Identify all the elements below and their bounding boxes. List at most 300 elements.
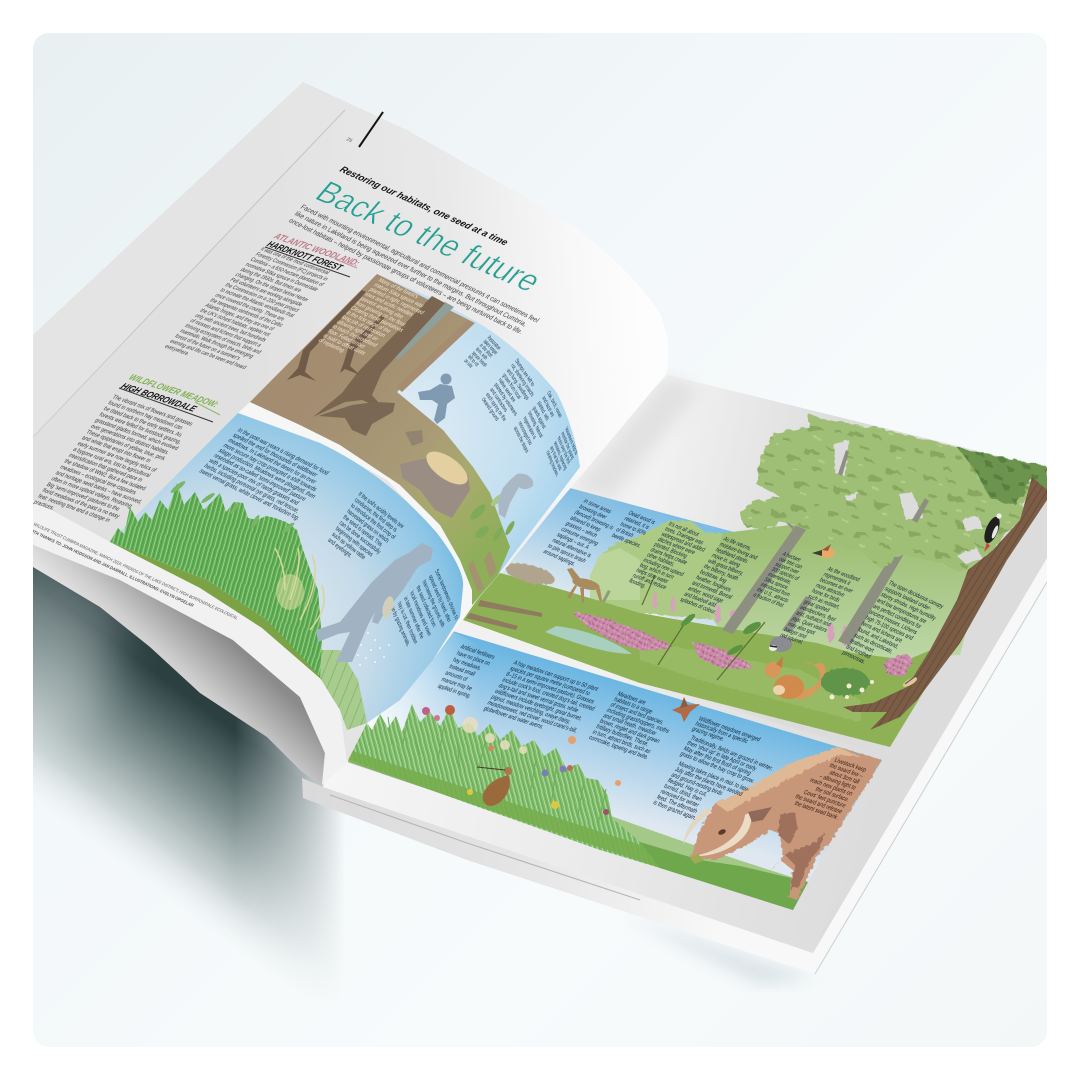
caption: mowing: removed for winter bbox=[659, 789, 700, 809]
body text: High Borrowdale: and heritage seed banks – have survived, bbox=[54, 470, 143, 506]
caption: as life returns: move in, along bbox=[710, 553, 741, 569]
body text: High Borrowdale: feat: needing time and a change in bbox=[36, 494, 111, 524]
wildflowers bbox=[422, 705, 621, 815]
body text: High Borrowdale: early summer are now largely relics of bbox=[76, 441, 158, 474]
caption: post-war: silage production. Meadows were ploughed, then bbox=[216, 448, 317, 500]
body text: Hardknott Forest: of mosses and lichens that support a bbox=[188, 318, 263, 349]
brown ground bbox=[250, 274, 510, 605]
caption: a hectare: support over bbox=[773, 561, 800, 576]
caption: not all about trees: bog, which in turn bbox=[638, 563, 675, 581]
caption: meadows are habitats: and small heath, meadow bbox=[601, 713, 658, 737]
silhouette: forester with chainsaw bbox=[418, 374, 455, 424]
body text: Hardknott Forest: It was one of the most controversial bbox=[258, 247, 331, 276]
intro paragraph: Faced with mounting environmental, agricultural and commercial pressures it can sometimes feel bbox=[299, 203, 542, 324]
caption: soil acidity: such as yellow rattle bbox=[330, 531, 366, 562]
caption: livestock keep: the sward and release bbox=[794, 794, 843, 815]
caption: some areas: (fenced) browsing is bbox=[573, 510, 615, 531]
icon: flying orange bird bbox=[812, 544, 835, 558]
caption: not all about trees: ditches where were bbox=[656, 537, 696, 556]
caption: as the woodland: becomes an ever bbox=[818, 577, 854, 595]
body text: High Borrowdale: be dated back to the early settlers. As bbox=[102, 406, 183, 439]
caption: post-war: reseeded as so-called 'semi-improved' pasture bbox=[212, 453, 307, 503]
caption: sowing: harrowing the ground, with bbox=[421, 579, 445, 630]
body text: High Borrowdale: found in northern hay meadows can bbox=[106, 400, 184, 431]
pale third trunk bbox=[396, 320, 475, 392]
caption: not all about trees: widespread and added bbox=[659, 531, 706, 554]
caption: meadows are habitats: brown, ringlet and dark green bbox=[598, 718, 661, 745]
sky bbox=[502, 488, 734, 626]
heading: Atlantic woodland: HARDKNOTT FOREST bbox=[264, 240, 345, 273]
caption: some areas: In some areas bbox=[582, 498, 613, 515]
body text: Hardknott Forest: changing. On the slopes below Harter bbox=[233, 272, 310, 303]
caption on brown panel: Clearing these plantations bbox=[349, 306, 405, 334]
caption: traditionally: grass to allow the hay crop to grow. bbox=[678, 751, 756, 785]
caption: as life returns: As life returns, bbox=[722, 536, 753, 552]
caption: some areas: grasses – which bbox=[564, 521, 598, 539]
table shadow under the book bbox=[33, 545, 340, 968]
caption: open deciduous canopy: ferns and lichens are bbox=[860, 621, 903, 645]
body text: Hardknott Forest: nonnative Sitka spruce in Dunnerdale bbox=[243, 262, 319, 293]
cow mane highlight bbox=[715, 747, 862, 812]
lighter left side of table shadow bbox=[33, 567, 137, 736]
caption: post-war: In the post-war years a rising demand for food bbox=[235, 428, 330, 477]
caption: not all about trees: including new upland bbox=[642, 557, 685, 578]
caption: as life returns: with grass bilberry, bbox=[705, 558, 745, 577]
title: Back to the future bbox=[308, 175, 549, 298]
caption: open deciduous canopy: and knothed bbox=[844, 644, 872, 661]
caption 3 on sky: guards against bbox=[531, 405, 547, 431]
caption: livestock keep: the soil surface. bbox=[814, 787, 850, 804]
caption: a hectare: oak tree can bbox=[777, 556, 804, 571]
caption 2 on sky: cleared ground bbox=[480, 396, 500, 423]
caption 2 on sky: grown from local bbox=[501, 372, 522, 401]
caption: mowing: and ground-nesting birds bbox=[669, 772, 724, 797]
caption: livestock keep: Cows' feet puncture bbox=[802, 790, 847, 810]
caption: post-war: sweet vernal grass, white clover and Yorkshire fog. bbox=[197, 468, 301, 522]
caption: post-war: with a species-poor mix of hardy grasses and bbox=[206, 458, 300, 507]
caption: mowing: is then grazed again. bbox=[651, 800, 698, 822]
caption: post-war: spelled the end for thousands of wildflower bbox=[231, 433, 318, 479]
caption: a hay meadow: meadowsweet, red clover, wood crane's-bill, bbox=[486, 700, 578, 735]
caption 4 on sky: clearing bracken. bbox=[545, 449, 559, 479]
caption: mowing: July after the plants have seeded bbox=[673, 767, 744, 798]
caption: open deciduous canopy: supports lowland under- bbox=[883, 586, 933, 613]
caption: dead wood: beetle species. bbox=[610, 533, 642, 550]
cow body bbox=[690, 747, 882, 900]
caption: post-war: more secure hay crop prompted a shift towards bbox=[221, 443, 318, 493]
caption: as the woodland: regenerates it bbox=[822, 572, 852, 587]
heather clumps bbox=[572, 611, 911, 676]
caption: a hay meadow: species per square metre (compared to bbox=[508, 666, 591, 697]
small stump bbox=[405, 430, 423, 446]
dead wood logs bbox=[468, 550, 497, 592]
caption: open deciduous canopy: feather-wort bbox=[848, 638, 875, 655]
body text: Hardknott Forest: Forestry Commission (FC) projects in bbox=[253, 252, 329, 283]
caption on brown panel: floor. Felled timber bbox=[326, 329, 367, 350]
caption: as the woodland: may also spot bbox=[786, 621, 817, 637]
caption: soil acidity: conducive, the first step is bbox=[353, 497, 398, 534]
caption: open deciduous canopy: The open deciduous canopy bbox=[887, 580, 945, 610]
caption: a hectare: 300 species of bbox=[770, 567, 800, 582]
caption: open deciduous canopy: ancient mosses. Lichens bbox=[867, 609, 918, 636]
body text: Hardknott Forest: only with ancient trees, but hundreds bbox=[193, 313, 268, 344]
body text: Hardknott Forest: evening and life can be seen and heard bbox=[168, 339, 248, 371]
caption: mowing: feed. The aftermath bbox=[655, 794, 698, 815]
body text: High Borrowdale: a bygone rural era, lost to agricultural bbox=[71, 447, 151, 479]
caption 1 on sky: spruce brash bbox=[470, 350, 488, 369]
caption: dead wood: Dead wood is bbox=[627, 510, 657, 526]
right foreground grass bbox=[640, 842, 808, 910]
caption 1 on sky: Restoration bbox=[485, 335, 502, 352]
caption: a hay meadow: A hay meadow can support up to 50 plant bbox=[512, 660, 600, 693]
body text: Hardknott Forest: Fell volunteers are working alongside bbox=[228, 277, 304, 308]
caption: sowing: the seed collected from bbox=[415, 584, 437, 630]
caption: livestock keep: Livestock keep bbox=[833, 757, 868, 774]
right page surface bbox=[323, 375, 1047, 953]
caption 4 on sky: seasons, replacing bbox=[552, 439, 568, 473]
caption: artificial fertilisers: Artificial fertilisers bbox=[459, 644, 496, 661]
caption: a hay meadow: dog's-tail and sweet vernal grass, while bbox=[497, 683, 580, 714]
caption 2 on sky: planted by volunteers bbox=[493, 381, 519, 418]
foxgloves bbox=[652, 592, 848, 646]
caption: not all about trees: trees. Drainage was bbox=[663, 526, 705, 547]
caption: sowing: Some landowners choose to bbox=[433, 568, 459, 622]
fallen logs bbox=[466, 600, 542, 630]
caption: artificial fertilisers: manure may be bbox=[440, 677, 473, 693]
soft shadow at book corner bbox=[658, 928, 801, 988]
caption: livestock keep: – allowing light to bbox=[818, 774, 858, 792]
caption 3 on sky: and hazel are bbox=[541, 395, 555, 420]
body text: High Borrowdale: practices. bbox=[32, 500, 56, 512]
caption 4 on sky: Volunteers help to bbox=[563, 425, 579, 457]
caption on brown panel: mature Sitka spruce was bbox=[372, 282, 425, 309]
caption: open deciduous canopy: pinnocreas. bbox=[841, 650, 867, 666]
icon: red squirrel bbox=[765, 656, 826, 700]
caption on brown panel: to reach the woodland bbox=[330, 324, 378, 349]
caption: some areas: natural alternative is bbox=[550, 538, 593, 559]
caption: not all about trees: It's not all about bbox=[667, 521, 700, 538]
large stump bbox=[400, 445, 473, 518]
caption: meadows are habitats: of insect and bird species, bbox=[609, 702, 665, 726]
body text: High Borrowdale: meadows – ecological time-capsules bbox=[58, 464, 137, 496]
caption: dead wood: retained, it is bbox=[622, 516, 651, 531]
body text: Hardknott Forest: to recreate the Atlantic woodlands that bbox=[218, 288, 296, 319]
subtitle: Restoring our habitats, one seed at a time bbox=[337, 165, 510, 248]
caption: as the woodland: badger and bbox=[782, 627, 808, 640]
body text: High Borrowdale: intensification that gathered pace in bbox=[67, 453, 143, 484]
caption 3 on sky: regeneration is bbox=[522, 415, 537, 442]
caption: meadows are habitats: in turn, attract birds, such as bbox=[591, 729, 652, 755]
caption: as life returns: splashes of colour. bbox=[678, 597, 718, 616]
grey-brown tree trunks bbox=[722, 526, 903, 646]
caption 4 on sky: trees over the first bbox=[556, 435, 571, 467]
caption on brown panel: is sold to offset costs bbox=[321, 333, 367, 357]
bright lower margin bbox=[33, 500, 347, 785]
caption on brown panel: is the first stage of the bbox=[344, 310, 392, 335]
caption: some areas: around saplings. bbox=[541, 549, 577, 568]
folio rule bbox=[359, 112, 383, 147]
pond bbox=[545, 626, 632, 654]
caption: livestock keep: the sward low – bbox=[828, 763, 864, 780]
bottom green band bbox=[348, 750, 793, 910]
seed basket bbox=[380, 595, 396, 619]
caption: sowing: in late summer after the bbox=[402, 595, 425, 641]
dark canopy bbox=[957, 447, 1047, 505]
body text: High Borrowdale: over generations into distinct habitats. bbox=[89, 424, 171, 456]
caption: wildflower meadows emerged: Wildflower meadows emerged bbox=[697, 716, 761, 743]
caption on brown panel: Many of the forest's bbox=[376, 278, 420, 300]
caption on brown panel: allowing light and air bbox=[335, 319, 380, 342]
caption: open deciduous canopy: are perfect conditions for bbox=[871, 603, 922, 631]
caption: open deciduous canopy: found, and Lakeland, bbox=[856, 627, 900, 651]
caption: a hectare: Sitka spruce, bbox=[762, 577, 790, 592]
caption 2 on sky: Stumps are left to bbox=[513, 357, 536, 389]
caption 2 on sky: and fungi. Seedlings bbox=[505, 367, 530, 402]
caption 1 on sky: in the short bbox=[478, 342, 494, 360]
caption: some areas: saplings – out. A bbox=[555, 532, 590, 551]
caption: some areas: browsing deer bbox=[577, 504, 608, 521]
icon: deer bbox=[567, 568, 602, 603]
caption: a hectare: introduced from bbox=[759, 582, 792, 599]
cow dark patches bbox=[778, 812, 825, 890]
saplings on slope bbox=[468, 492, 516, 542]
caption: sowing: spread seed by hand, after bbox=[427, 573, 452, 625]
icon: woodpecker bbox=[984, 513, 1002, 552]
caption: meadows are habitats: corncrake, lapwing and twite. bbox=[587, 735, 650, 761]
caption: livestock keep: the latent seed bank. bbox=[793, 801, 840, 822]
seed heads bbox=[169, 480, 296, 535]
heading: Wildflower meadow: HIGH BORROWDALE bbox=[118, 382, 199, 414]
distant pale trees bbox=[590, 520, 723, 620]
dark main trunk bbox=[313, 296, 445, 417]
body text: Hardknott Forest: thriving ecosystem of insects, birds and bbox=[183, 323, 262, 355]
left page surface bbox=[33, 82, 668, 785]
body text: High Borrowdale: the shadow of WW2. But a few isolated bbox=[62, 459, 147, 492]
caption 2 on sky: native seed are bbox=[497, 377, 517, 405]
body text: Hardknott Forest: forest of the future on a summer's bbox=[173, 334, 242, 362]
body text: High Borrowdale: These epiphanies of yellow, blue, pink bbox=[84, 429, 166, 462]
caption: post-war: meadows. In Lakeland the desire for an ever bbox=[226, 438, 317, 486]
cow horns bbox=[694, 812, 751, 856]
intro paragraph: like nature in Lakeland is being squeezed ever further to the margins. But throughout Cumbria, bbox=[293, 210, 529, 328]
sky bbox=[250, 274, 580, 605]
gutter shadow on right page bbox=[575, 375, 700, 500]
caption: a hectare: invertebrate, bbox=[766, 572, 793, 586]
panel: hay meadow illustration, lower right page bbox=[345, 630, 882, 910]
caption: not all about trees: planted. Blocking bbox=[652, 542, 688, 560]
caption: meadows are habitats: Meadows are bbox=[616, 691, 647, 707]
caption 3 on sky: planted, with bbox=[536, 400, 550, 423]
body text: Hardknott Forest: the UK's richest habitats, replete not bbox=[198, 308, 272, 338]
caption: as the woodland: more attractive bbox=[814, 583, 846, 599]
icon: highland cow bbox=[683, 747, 882, 900]
caption: soil acidity: harvested grass on which bbox=[345, 508, 390, 545]
caption: wildflower meadows emerged: historically from a specific bbox=[693, 721, 749, 745]
caption: some areas: to pile spruce brash bbox=[546, 543, 587, 565]
caption: not all about trees: runoff and reduce bbox=[631, 573, 668, 591]
caption: open deciduous canopy: and low temperatures are bbox=[875, 598, 928, 625]
caption: meadows are habitats: habitats to a range bbox=[612, 697, 654, 716]
caption on brown panel: from growing on the floor. bbox=[353, 301, 408, 329]
body text: High Borrowdale: Big 'semi-improved' pastures to the bbox=[45, 482, 121, 513]
caption: as life returns: moisture-loving and bbox=[718, 542, 759, 562]
caption 1 on sky: takes longer bbox=[481, 338, 499, 357]
heading: Atlantic woodland: ATLANTIC WOODLAND: bbox=[270, 232, 362, 268]
caption: soil acidity: to introduce the first crop of bbox=[349, 503, 397, 542]
book edge: page block side bbox=[302, 558, 1047, 974]
caption 3 on sky: across the slopes bbox=[512, 425, 530, 456]
caption 3 on sky: encouraged too bbox=[517, 420, 533, 448]
silhouette: man sowing seed bbox=[316, 543, 433, 662]
caption: a hectare: a fraction of that. bbox=[751, 592, 786, 610]
caption: as the woodland: woodpeckers, flyer bbox=[797, 605, 837, 623]
caption: soil acidity: and eyebright. bbox=[326, 537, 353, 560]
body text: High Borrowdale: forests were felled for livestock grazing, bbox=[98, 412, 183, 446]
caption: artificial fertilisers: applied in spring. bbox=[436, 683, 472, 700]
scattered seed bbox=[357, 632, 390, 666]
saplings bbox=[642, 575, 765, 680]
bottom ground band bbox=[110, 542, 322, 680]
bright band between panels bbox=[238, 402, 473, 660]
small back trunks bbox=[287, 290, 385, 381]
forest background bbox=[702, 524, 986, 658]
caption: wildflower meadows emerged: grazing regime. bbox=[690, 726, 726, 743]
caption: traditionally: then 'shut up' in late April or early bbox=[685, 741, 758, 773]
body text: High Borrowdale: grassland glades formed, which evolved bbox=[93, 418, 179, 452]
caption: a hay meadow: pignut, meadow vetchling, oxeye daisy, bbox=[489, 694, 572, 726]
caption 2 on sky: each spring on the bbox=[484, 391, 507, 424]
grass blades bbox=[388, 717, 606, 825]
body text: High Borrowdale: florid meadows of the past is no easy bbox=[41, 488, 121, 520]
pale dry grasses bbox=[275, 548, 324, 630]
caption: livestock keep: reach new plants on bbox=[808, 777, 853, 798]
caption: as the woodland: great spotted bbox=[802, 599, 831, 614]
caption: as life returns: bedstraw, ling bbox=[698, 569, 728, 585]
caption: as life returns: the bilberry, heath bbox=[702, 564, 739, 582]
caption: meadows are habitats: fritillary butterflies. These, bbox=[594, 724, 650, 748]
caption 1 on sky: left to rot bbox=[466, 354, 480, 369]
caption: dead wood: of British bbox=[614, 527, 635, 539]
caption: dead wood: home to 80% bbox=[618, 521, 647, 537]
caption: as life returns: and bluebell add bbox=[682, 591, 717, 609]
caption: artificial fertilisers: have no place on bbox=[455, 651, 491, 667]
caption: artificial fertilisers: Instead small bbox=[447, 664, 476, 678]
icon: flying brown bird bbox=[672, 697, 700, 722]
caption: sowing: in by grazing animals. bbox=[390, 606, 411, 649]
stump with roots bbox=[318, 402, 395, 436]
hill with stripes bbox=[312, 650, 367, 730]
caption: artificial fertilisers: amounts of bbox=[444, 670, 469, 683]
body text: Hardknott Forest: mammals. Walk through the emerging bbox=[178, 328, 255, 360]
body text: High Borrowdale: The vibrant mix of flowers and grasses bbox=[111, 394, 194, 428]
caption: as life returns: heathland plants bbox=[714, 547, 749, 565]
caption: sowing: hay is cut, then trodden bbox=[396, 601, 418, 646]
caption: a hay meadow: 8–15 in a semi-improved pasture). Grasses bbox=[504, 672, 595, 706]
body text: Hardknott Forest: the temperate rainforests of the Celtic bbox=[208, 298, 284, 329]
tall grass bbox=[110, 483, 322, 678]
caption: as the woodland: jays. Quiet visitors bbox=[789, 616, 829, 634]
caption: as the woodland: red squirrel. bbox=[778, 632, 805, 646]
caption 1 on sky: term, with bbox=[474, 346, 489, 362]
brush pile bbox=[506, 562, 555, 586]
caption: not all about trees: helps slow water bbox=[634, 568, 670, 585]
icon: badger bbox=[769, 636, 792, 652]
caption: open deciduous canopy: storey shrubs. High humidity bbox=[879, 592, 937, 622]
icon: curlew bbox=[477, 767, 512, 806]
caption 4 on sky: monitor the young bbox=[560, 430, 575, 462]
caption on brown panel: of replanting. bbox=[316, 338, 347, 354]
caption: a hay meadow: wildflowers include eyebright, great burnet, bbox=[492, 688, 583, 722]
curled page underside bbox=[33, 545, 328, 787]
icon: nuthatch bbox=[902, 674, 918, 687]
caption: a hectare: the U.S., attracts bbox=[755, 587, 790, 604]
panel: wildflower meadow illustration, left page bbox=[110, 413, 463, 730]
caption: livestock keep: about 3cm tall bbox=[828, 770, 860, 786]
caption 2 on sky: rot, sheltering insects bbox=[509, 362, 535, 399]
text: upper panel captions bbox=[541, 498, 945, 680]
lighter grass strip bbox=[640, 640, 860, 722]
tree canopy bbox=[740, 415, 1047, 572]
caption 4 on sky: any that fail and bbox=[549, 444, 563, 473]
body text: Hardknott Forest: Cumbria – a 650-hectare plantation of bbox=[248, 257, 325, 288]
caption 2 on sky: and contractors bbox=[488, 386, 509, 415]
inner sheet line bbox=[33, 110, 345, 437]
caption: soil acidity: beginning with species bbox=[334, 525, 374, 559]
caption: a hay meadow: include cock's-foot, crested dog's-tail, crested bbox=[501, 677, 596, 713]
body text: High Borrowdale: and white that erupt into flower in bbox=[80, 435, 152, 465]
caption 3 on sky: Oak, birch, rowan bbox=[545, 389, 563, 420]
footer credits: WILDLIFE TRUST CUMBRIA MAGAZINE, MARCH 2019; FRIENDS OF THE LAKE DISTRICT; HIGH BORROWDALE ECOLOGICAL bbox=[32, 522, 239, 620]
cow ear bbox=[748, 807, 772, 822]
sky bbox=[345, 630, 882, 910]
meadow grass bbox=[350, 704, 660, 868]
icon: large foreground trunk bbox=[843, 477, 1047, 730]
caption: a hay meadow: globeflower and water avens. bbox=[482, 706, 545, 731]
cow grazing grass bbox=[690, 854, 704, 864]
caption: as the woodland: and, nuthatch and bbox=[794, 610, 832, 628]
caption: open deciduous canopy: such as decorticate, bbox=[852, 632, 894, 656]
panel: Atlantic woodland illustration, left page bbox=[250, 274, 580, 605]
caption: meadows are habitats: including grasshoppers, moths bbox=[605, 708, 671, 735]
canopy gaps bbox=[834, 440, 983, 564]
footer credits: WITH THANKS TO: JOHN HODGSON AND JAN DARRALL. ILLUSTRATIONS: EVELYN OPGELAR bbox=[28, 528, 195, 608]
body text: Hardknott Forest: the Commission on a 200-year project bbox=[223, 282, 301, 314]
caption: as life returns: amber, wood sage bbox=[686, 586, 725, 605]
caption: as life returns: and tormentil. Boreal bbox=[690, 580, 733, 601]
body text: Hardknott Forest: once covered the county. These are bbox=[213, 293, 286, 322]
caption: mowing: turned, dried, then bbox=[662, 783, 703, 803]
caption on brown panel: rows and acidic needles bbox=[363, 292, 415, 318]
caption: traditionally: Traditionally, fields are grazed in winter, bbox=[689, 735, 774, 772]
ground bbox=[463, 573, 955, 747]
caption: as life returns: heather, foxgloves bbox=[694, 575, 732, 594]
body text: Hardknott Forest: during the 1930s. But times are bbox=[238, 267, 303, 294]
caption: as the woodland: such as redstart, bbox=[806, 594, 841, 611]
caption: as the woodland: home for birds bbox=[810, 588, 841, 604]
caption: soil acidity: can be done successfully bbox=[338, 520, 382, 556]
caption: some areas: consume emerging bbox=[559, 526, 599, 547]
caption on brown panel: long job of restoration bbox=[339, 315, 387, 339]
caption: soil acidity: If the soil's acidity levels are bbox=[357, 491, 405, 531]
caption: open deciduous canopy: high 75-100 species and bbox=[864, 615, 914, 642]
caption: artificial fertilisers: hay meadows. bbox=[451, 657, 483, 672]
caption 3 on sky: browsing. Natural bbox=[526, 410, 544, 440]
caption: not all about trees: other habitats, bbox=[645, 552, 676, 568]
caption: some areas: allowed to keep bbox=[568, 515, 602, 533]
caption: as the woodland: As the woodland bbox=[826, 566, 861, 583]
caption on brown panel: prevent anything else bbox=[358, 296, 405, 320]
intro paragraph: once-lost habitats – helped by passionate groups of volunteers – are being nurtured back to life. bbox=[287, 216, 525, 336]
